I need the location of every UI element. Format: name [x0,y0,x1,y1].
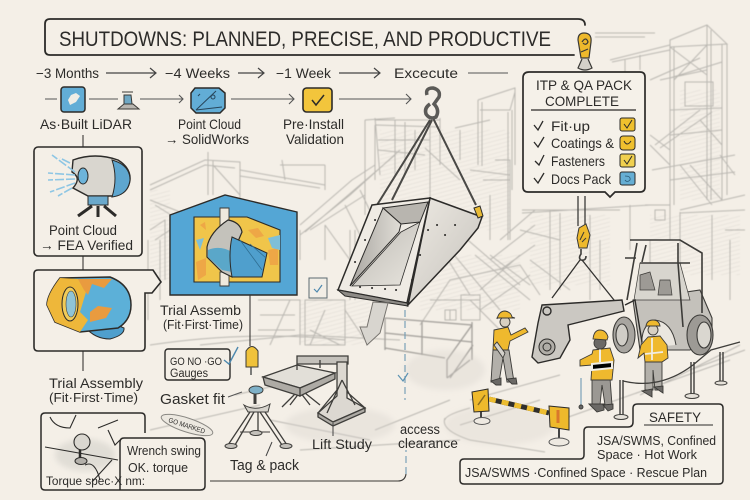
body text [465,433,716,480]
flange top and bottom [220,208,229,286]
icon: blue check [224,347,238,364]
background shading [285,350,555,445]
label: pre-install validation [283,116,344,147]
leader: access clearance route [210,310,408,481]
right tower [650,25,735,205]
label: lift study: Lift Study [312,436,372,452]
heading: SAFETY [649,409,702,425]
arrow: to execute [339,68,380,78]
arrow: lowering direction [360,302,388,345]
row: coatings: Coatings & [551,135,615,151]
icon: main crane hook and slings [377,88,476,205]
caption: trial assembly (left): Trial Assembly [49,375,143,391]
callout: go no-go gauges: Gauges [170,368,208,380]
label: lift study [312,423,372,452]
callout: ITP and QA pack [523,72,645,197]
body text: JSA/SWMS ·Confined Space · Rescue Plan [465,465,707,480]
label: access clearance [398,422,458,451]
inner left slope [350,208,401,286]
note: wrench swing: Wrench swing [127,444,201,458]
label: point cloud to solidworks: Point Cloud [178,116,241,132]
label: as-built lidar: As·Built LiDAR [40,116,132,132]
phase: 3 months: −3 Months [36,66,99,81]
callout: go no-go gauges [165,347,238,380]
left centre roof trusses [148,118,400,345]
icon: second crane hook and cable [552,196,622,310]
label: gasket fit: Gasket fit [160,392,225,408]
illustration: gauge tripod stand [225,386,292,448]
background: industrial plant sketch [148,25,745,452]
illustration: lift study table on stands [263,356,365,426]
label: tag and pack: Tag & pack [230,458,300,474]
caption: point cloud fea verified: → FEA Verified [40,237,133,253]
checklist clipboard icon [309,278,327,298]
left sign [472,389,490,424]
bottom lip [338,290,408,306]
phase: execute: Excecute [394,66,458,81]
cab interior [634,263,690,300]
yellow shackle [474,206,483,218]
caption: point cloud fea verified [40,222,133,253]
inner far wall [383,202,428,224]
timeline: milestone icons and connectors [45,87,411,113]
worker: pointing supervisor [491,311,528,385]
worker: centre, seen from behind [579,330,614,412]
caption: point cloud fea verified: Point Cloud [49,222,117,238]
safety barrier: signs and striped bar [472,389,569,446]
icon: laser scanner [48,155,130,217]
panel: FEA heat map shell [34,270,161,351]
connectors [45,94,411,104]
icon: yellow tag on line [246,295,258,375]
worker: right [638,320,668,397]
caption: trial assembly (centre): Trial Assemb [160,302,241,318]
row: fit-up: Fit·up [551,118,590,134]
hopper section [207,220,242,277]
body text: Space · Hot Work [597,447,697,462]
arrow: to 1 week [238,68,264,78]
heading [531,77,636,110]
icon: validation check tile [303,88,332,112]
milestone labels [40,116,344,147]
upper right girders [595,33,670,75]
roll cage [625,240,702,327]
body text: JSA/SWMS, Confined [597,433,716,448]
striped bar [489,399,549,413]
rivets [355,220,455,290]
ground lines [150,336,745,452]
icon: point cloud tile [191,88,225,113]
callout: go no-go gauges: GO NO ·GO [170,356,222,368]
label: tag and pack [230,442,300,474]
safety rope and stanchions [614,342,740,420]
row: docs pack: Docs Pack [551,171,612,187]
hatch shading [150,90,740,345]
caption: trial assembly (centre): (Fit·First·Time) [163,318,243,332]
open mouth frame [338,198,430,303]
timeline: phase labels and arrows [36,66,508,81]
icon: heat map cylinder [47,277,131,339]
heading: COMPLETE [545,93,619,109]
label: access clearance: clearance [398,436,458,451]
title banner: SHUTDOWNS: PLANNED, PRECISE, AND PRODUCTIVE [59,28,551,51]
arrow: to 4 weeks [106,68,156,78]
right sign [549,406,569,446]
panel: lidar scanner [34,135,142,371]
illustration: forklift [613,240,713,355]
right outer panel [408,198,482,305]
icon: yellow crane hook on title [578,33,592,70]
panel: blue FEA house diagram [170,195,297,295]
heading: ITP & QA PACK [536,77,633,93]
illustration: lifted steel arm [532,300,642,363]
note: wrench swing [127,444,201,475]
rear tyre [687,315,713,355]
title banner [45,19,585,55]
panel: torque wrench [41,413,205,490]
label: point cloud to solidworks: → SolidWorks [165,131,249,147]
labels: lift study and tag & pack [230,423,372,474]
row: fasteners: Fasteners [551,153,605,169]
label: pre-install validation: Validation [286,131,344,147]
body [633,290,712,350]
front tyre [613,317,635,353]
label: point cloud to solidworks [165,116,249,147]
illustration: lifted hopper [338,198,483,306]
note: wrench swing: OK. torque [128,460,188,475]
phase: 4 weeks: −4 Weeks [165,66,230,81]
label: access clearance: access [400,422,440,437]
icon: small tripod scanner [118,92,139,109]
wheel arch [642,320,676,348]
railing near dashed line [385,318,473,378]
middle structures behind hook [375,88,745,310]
inner floor [352,222,420,286]
caption: trial assembly (centre) [160,302,243,332]
phase: 1 week: −1 Week [276,66,331,81]
line: after execute [468,72,508,74]
stamp: go marked [159,410,215,440]
caption: trial assembly (left): (Fit·First·Time) [49,391,138,405]
caption: trial assembly (left) [49,375,143,405]
heat map core [194,217,280,282]
panel: safety [460,404,723,484]
label: pre-install validation: Pre·Install [283,116,344,132]
icon: LiDAR scan tile [61,87,85,112]
stamp: go marked: GO MARKED [167,417,206,436]
lower right sheds [420,255,540,330]
illustration: hand and bolt [45,415,120,482]
caption: torque spec: Torque spec·X nm: [46,476,145,488]
